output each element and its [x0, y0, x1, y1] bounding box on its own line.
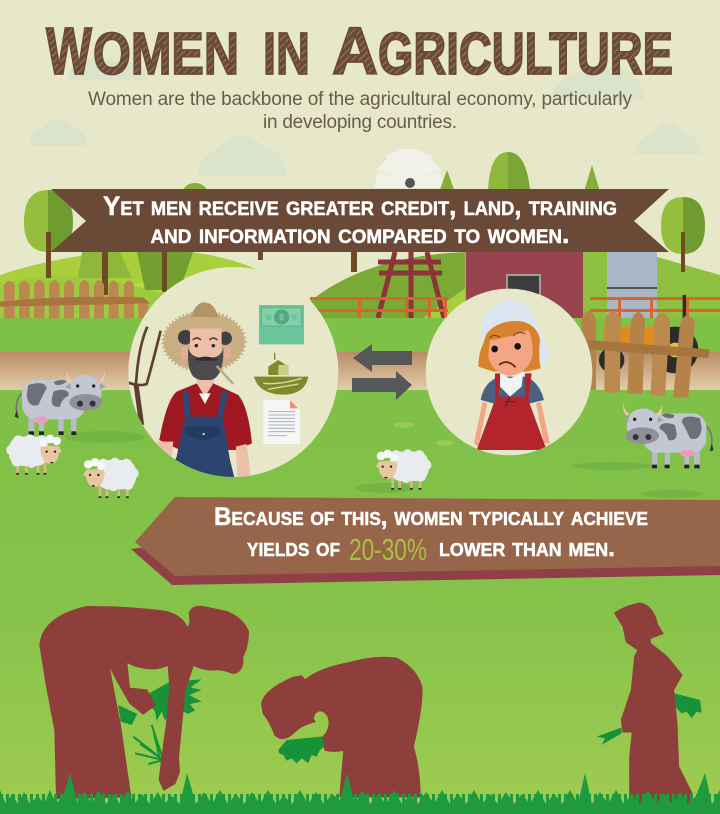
- subtitle: [88, 89, 632, 133]
- bottom banner: Because of this, women typically achieve: [214, 503, 648, 531]
- tractor: [599, 295, 698, 373]
- foreground grass: [0, 773, 720, 814]
- woman illustration: [474, 300, 551, 450]
- rice bundle: [118, 679, 202, 764]
- title: [46, 14, 673, 89]
- icon: farmhouse land: [254, 353, 308, 395]
- bottom banner: [131, 497, 720, 585]
- cow right: [622, 403, 714, 468]
- clouds: [30, 57, 700, 176]
- rice bundles: [597, 693, 702, 745]
- wooden picket fence left: [0, 280, 150, 318]
- windmill tower: [378, 252, 444, 318]
- silhouette: standing woman right: [597, 603, 702, 807]
- sheep left: [6, 434, 62, 475]
- icon: money: $: [279, 312, 284, 322]
- title: A: [332, 14, 378, 89]
- top banner: [51, 189, 669, 252]
- bottom banner: yields of: [247, 534, 340, 562]
- bottom banner: 20-30%: [349, 532, 427, 567]
- top banner: Yet men receive greater credit, land, training: [103, 191, 617, 221]
- broken fence right: [582, 311, 709, 398]
- top banner: and information compared to women.: [150, 219, 570, 249]
- road: [0, 352, 720, 391]
- panel: man circle: [128, 267, 338, 480]
- subtitle: in developing countries.: [263, 112, 457, 133]
- icon: left arrow: [353, 344, 412, 372]
- barn: [466, 252, 583, 318]
- windmill: [374, 149, 444, 188]
- farmer illustration: [128, 302, 252, 480]
- panel: woman circle: [426, 289, 592, 455]
- orange fences: [310, 297, 720, 318]
- silhouette: bending woman centre: [262, 657, 422, 797]
- silo: [607, 252, 657, 320]
- cow left: [15, 370, 106, 435]
- icon: document: [263, 400, 300, 444]
- title: OMEN: [93, 21, 239, 87]
- background hills: [0, 251, 720, 320]
- icon: money: [259, 305, 304, 344]
- subtitle: Women are the backbone of the agricultural economy, particularly: [88, 89, 632, 110]
- lawn: [0, 390, 720, 814]
- title: IN: [263, 21, 310, 87]
- silhouette: bending woman left: [40, 606, 248, 798]
- ground shadows: [65, 422, 702, 498]
- field strip: [0, 318, 720, 353]
- icon: right arrow: [352, 371, 412, 400]
- bottom banner: lower than men.: [439, 534, 615, 562]
- sheep right: [376, 449, 431, 490]
- background trees: [24, 152, 705, 295]
- title: W: [46, 14, 93, 89]
- rice bundle: [278, 736, 328, 763]
- sheep centre: [83, 458, 139, 498]
